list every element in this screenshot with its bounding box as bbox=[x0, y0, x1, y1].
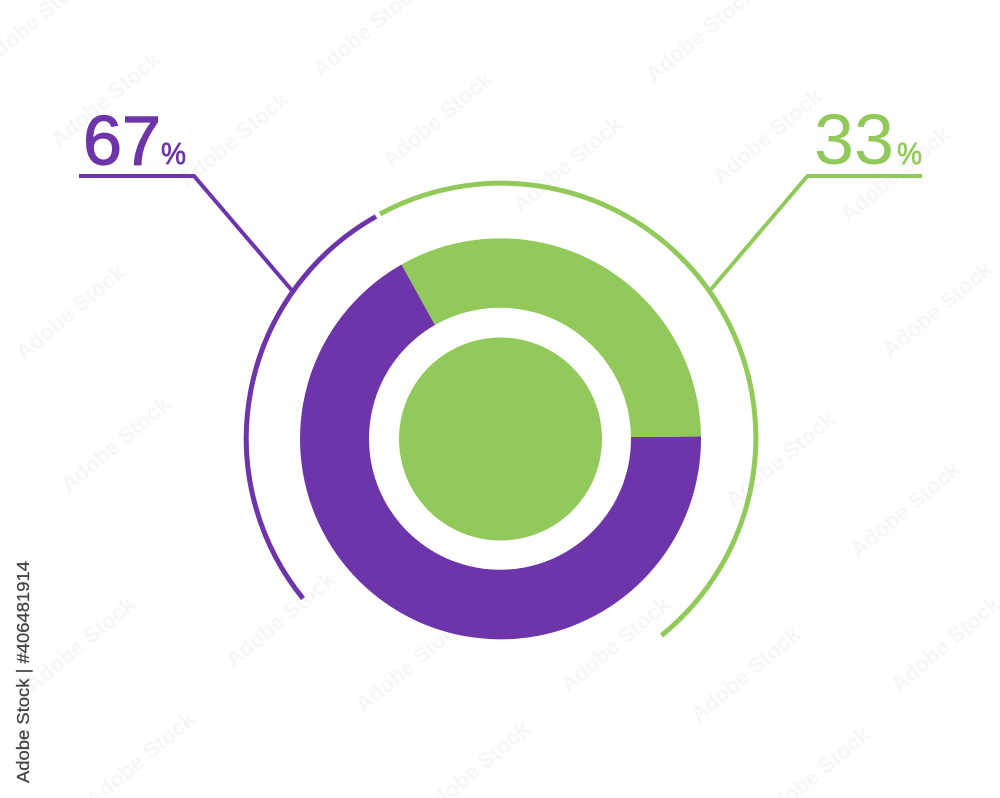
watermark pattern: Adobe Stock bbox=[11, 259, 130, 365]
watermark pattern: Adobe Stock bbox=[708, 83, 827, 189]
donut chart bbox=[300, 238, 701, 639]
watermark pattern: Adobe Stock bbox=[21, 591, 140, 697]
leader line: purple bbox=[79, 176, 292, 290]
watermark pattern: Adobe Stock bbox=[846, 456, 965, 562]
outer arc: green 33% bbox=[380, 183, 756, 636]
leader line: green bbox=[710, 176, 922, 290]
watermark pattern: Adobe Stock bbox=[221, 566, 340, 672]
watermark pattern: Adobe Stock bbox=[721, 406, 840, 512]
watermark pattern: Adobe Stock bbox=[686, 621, 805, 727]
watermark pattern: Adobe Stock bbox=[174, 86, 293, 192]
label: 67%: % bbox=[161, 136, 186, 171]
watermark pattern: Adobe Stock bbox=[378, 66, 497, 172]
watermark pattern: Adobe Stock bbox=[56, 391, 175, 497]
label: 33%: 33 bbox=[814, 101, 894, 180]
stock id side text: Adobe Stock | #406481914 bbox=[13, 561, 33, 783]
label: 67%: 67 bbox=[83, 102, 161, 180]
donut segment: purple 67% bbox=[300, 264, 701, 639]
label: 33%: % bbox=[897, 136, 922, 171]
watermark pattern: Adobe Stock bbox=[351, 611, 470, 717]
watermark pattern: Adobe Stock bbox=[836, 121, 955, 227]
donut segment: green 33% bbox=[402, 238, 701, 437]
watermark pattern: Adobe Stock bbox=[878, 256, 997, 362]
watermark pattern: Adobe Stock bbox=[556, 591, 675, 697]
outer arc: purple 67% bbox=[246, 216, 376, 598]
center circle bbox=[399, 338, 602, 540]
watermark pattern: Adobe Stock bbox=[46, 46, 165, 152]
watermark pattern: Adobe Stock bbox=[508, 111, 627, 217]
